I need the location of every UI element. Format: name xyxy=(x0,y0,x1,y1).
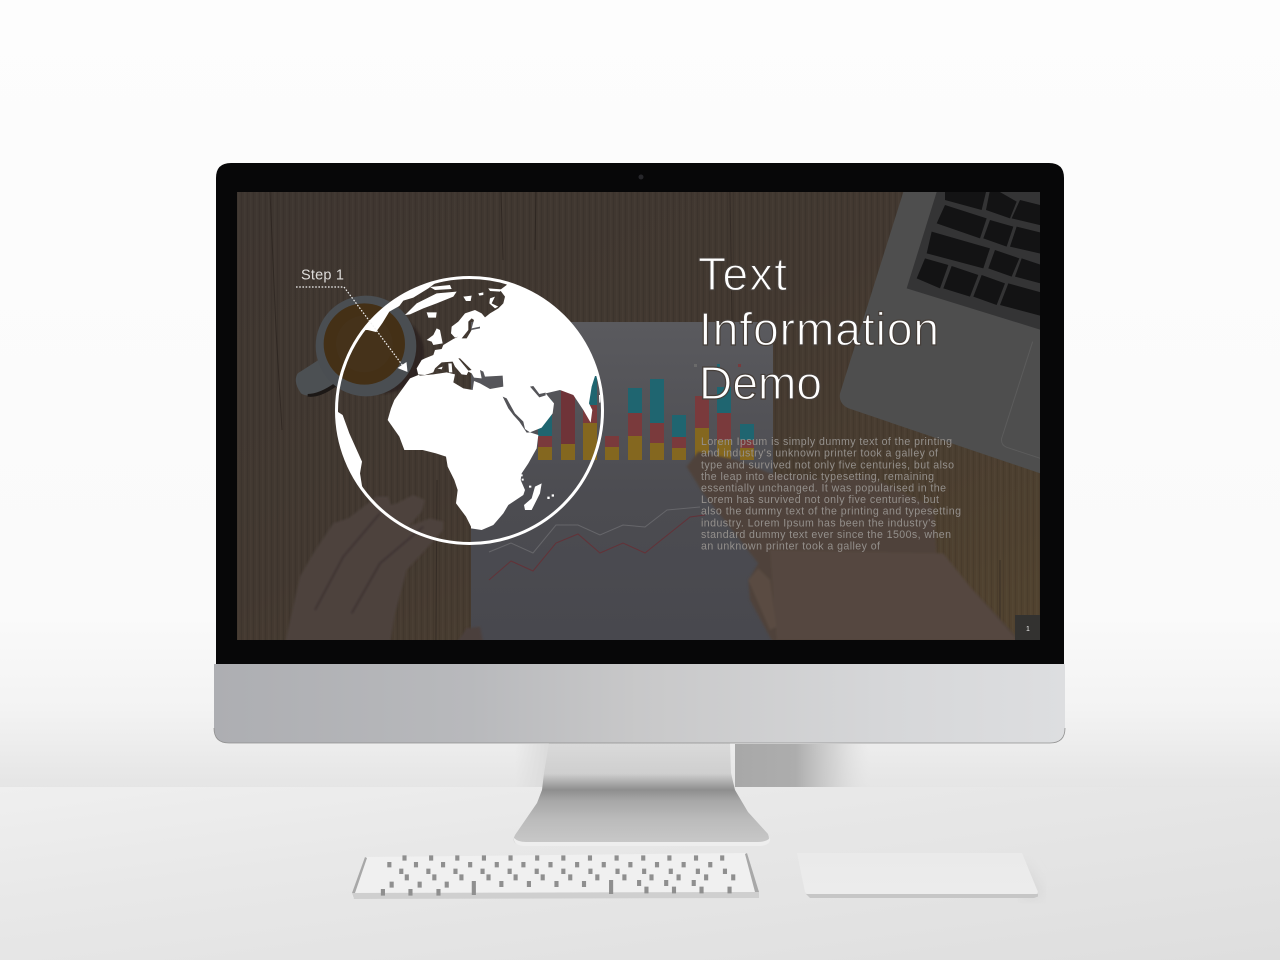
line chart xyxy=(489,507,705,580)
paper sheet with charts xyxy=(471,322,773,640)
stand shadow on wall xyxy=(515,744,870,787)
body text: Lorem has survived not only five centuries, but xyxy=(701,494,939,506)
keyboard key gaps xyxy=(381,855,735,896)
laptop trackpad xyxy=(1002,342,1043,459)
body text: also the dummy text of the printing and typesetting xyxy=(701,506,961,518)
globe ring xyxy=(336,278,602,544)
page number badge: 1 xyxy=(1026,626,1030,633)
body text xyxy=(701,436,961,553)
body text: industry. Lorem Ipsum has been the industry's xyxy=(701,517,936,529)
dotted callout arrow xyxy=(296,287,408,372)
thumb of second hand xyxy=(457,627,483,643)
cup handle xyxy=(296,360,333,396)
step 1 label: Step 1 xyxy=(301,268,344,284)
right hand xyxy=(687,452,1017,643)
cup shadow xyxy=(384,324,424,394)
body text: an unknown printer took a galley of xyxy=(701,541,880,553)
title: Information xyxy=(699,303,939,355)
body text: type and survived not only five centuries, but also xyxy=(701,459,954,471)
left hand xyxy=(285,495,483,643)
body text: and industry's unknown printer took a galley of xyxy=(701,448,938,460)
title: Demo xyxy=(699,357,822,409)
webcam xyxy=(638,174,644,180)
monitor bezel xyxy=(216,163,1064,664)
title: Text xyxy=(698,248,787,300)
chart legend xyxy=(694,364,741,367)
globe xyxy=(330,270,610,550)
trackpad xyxy=(797,853,1044,899)
body text: essentially unchanged. It was popularised in the xyxy=(701,482,946,494)
keyboard xyxy=(352,853,759,899)
title xyxy=(698,258,936,400)
laptop xyxy=(840,187,1047,475)
monitor stand xyxy=(514,743,770,846)
coffee cup xyxy=(296,296,424,397)
laptop keys xyxy=(916,192,1040,316)
globe continents xyxy=(338,284,600,530)
wood desk photo xyxy=(237,192,1040,640)
page number badge xyxy=(1015,615,1040,640)
desk surface xyxy=(0,787,1280,960)
body text: standard dummy text ever since the 1500s, when xyxy=(701,529,951,541)
monitor chin xyxy=(214,664,1065,743)
body text: the leap into electronic typesetting, remaining xyxy=(701,471,934,483)
stacked bar chart xyxy=(538,370,754,460)
body text: Lorem Ipsum is simply dummy text of the printing xyxy=(701,436,952,448)
panel: screen slide xyxy=(237,187,1047,643)
